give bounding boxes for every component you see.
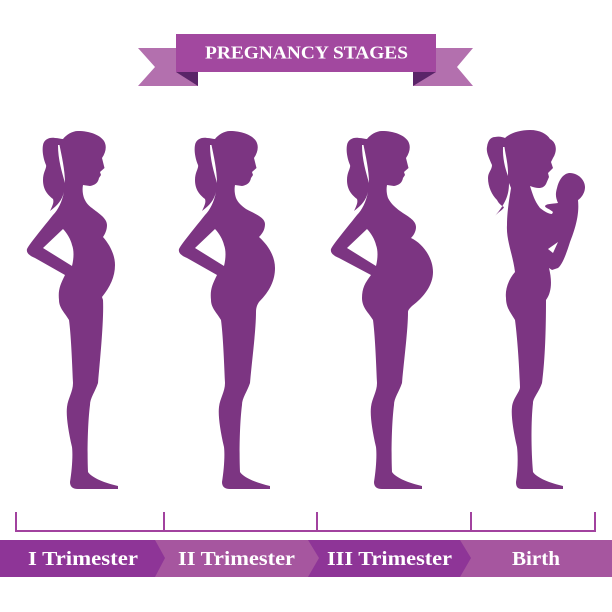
figure: third trimester silhouette (331, 131, 433, 489)
stage: I Trimester: I Trimester (28, 548, 138, 570)
title text: PREGNANCY STAGES (205, 42, 408, 62)
stage: I Trimester (0, 540, 165, 577)
figure: mother holding baby silhouette (487, 130, 585, 489)
timeline brackets (16, 512, 595, 531)
figure: first trimester silhouette (27, 131, 118, 489)
stage bar (0, 540, 612, 577)
stage: Birth: Birth (512, 548, 560, 570)
title banner (138, 34, 473, 86)
stage: II Trimester: II Trimester (178, 548, 295, 570)
stage: III Trimester (308, 540, 471, 577)
stage: III Trimester: III Trimester (327, 548, 452, 570)
figure: second trimester silhouette (179, 131, 275, 489)
